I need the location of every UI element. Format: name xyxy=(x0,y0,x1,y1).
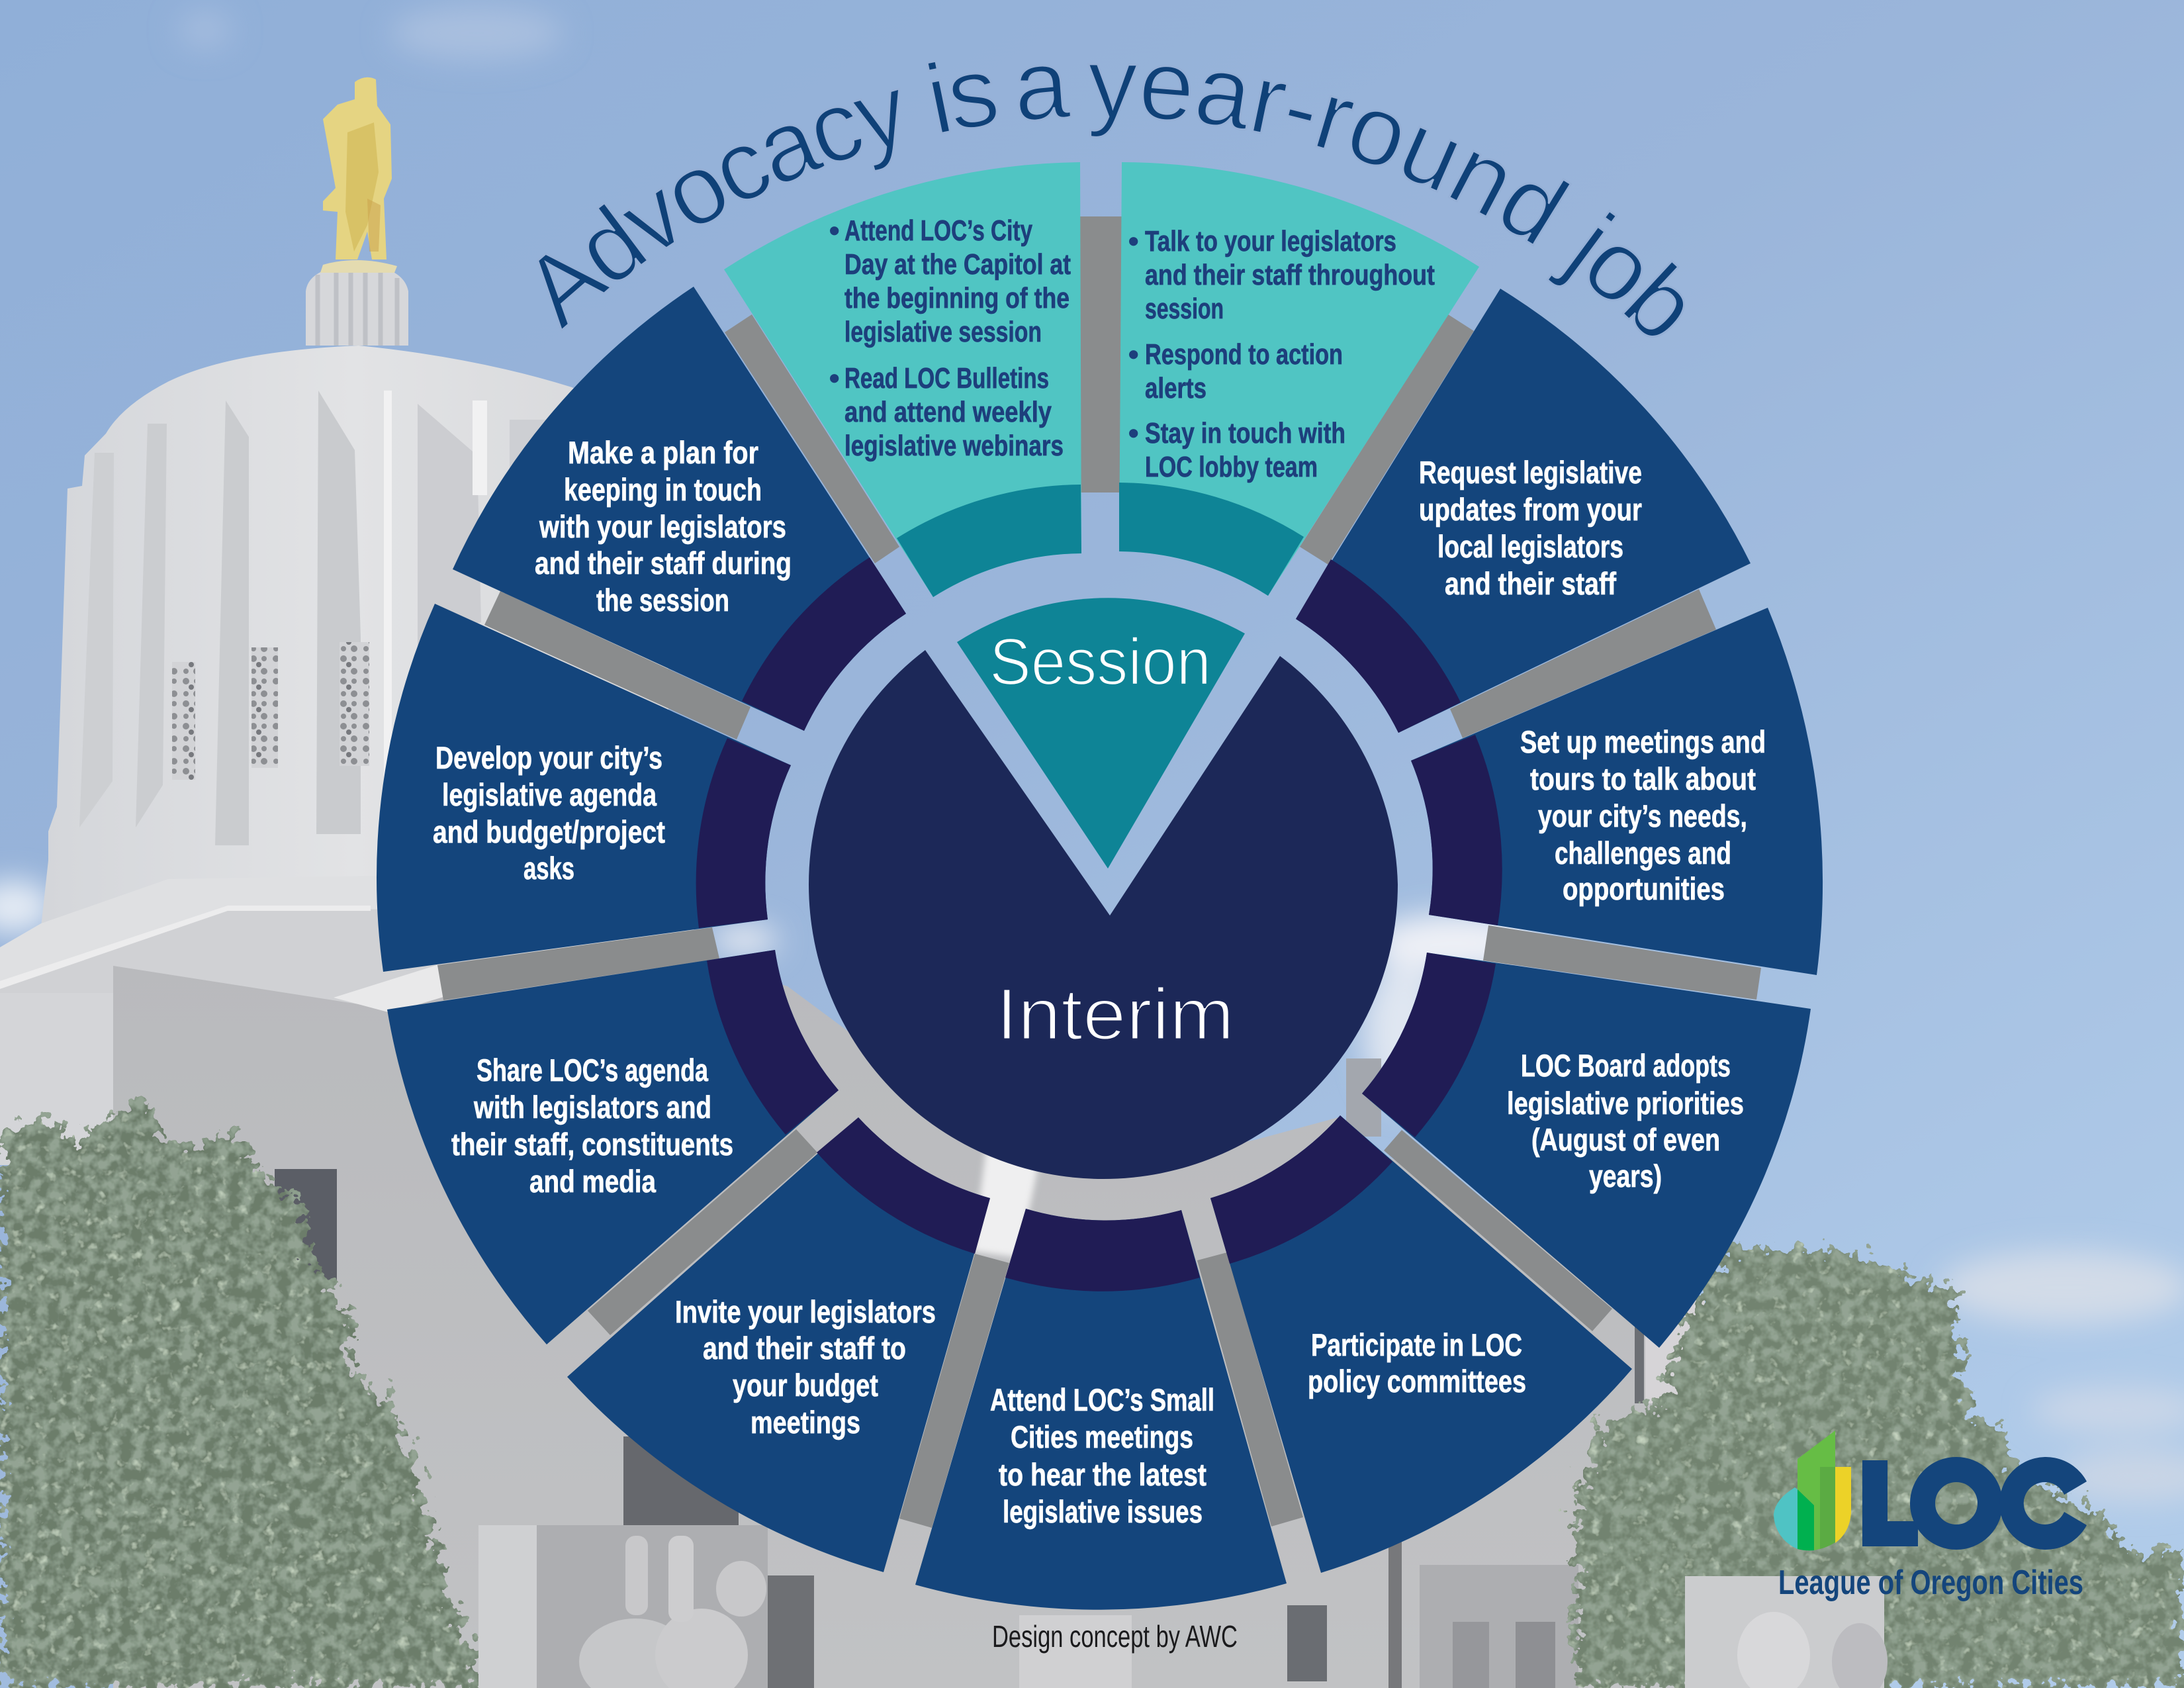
text: talk, respond, stay in touch bullets: Respond to action xyxy=(1145,338,1343,371)
text: City Day and bulletins bullets: legislative session xyxy=(844,316,1042,348)
text: make a plan xyxy=(535,435,792,618)
text: make a plan: the session xyxy=(596,583,729,618)
text: request updates: and their staff xyxy=(1445,566,1616,601)
text: invite: meetings xyxy=(751,1405,860,1440)
text: request updates: local legislators xyxy=(1437,529,1623,564)
text: request updates: Request legislative xyxy=(1419,455,1642,490)
text: make a plan: Make a plan for xyxy=(568,435,758,470)
logo wordmark: League of Oregon Cities xyxy=(1778,1564,2083,1602)
text: talk, respond, stay in touch bullets: • xyxy=(1128,225,1138,258)
text: set up meetings: tours to talk about xyxy=(1530,761,1756,796)
panel: small cities xyxy=(915,1209,1287,1610)
capitol main building facade xyxy=(113,957,1734,1688)
text: small cities: Attend LOC’s Small xyxy=(990,1382,1214,1417)
text: make a plan: with your legislators xyxy=(539,509,786,544)
panel: participate xyxy=(1210,1115,1632,1573)
text: develop agenda: and budget/project xyxy=(433,814,665,849)
text: City Day and bulletins bullets: legislative webinars xyxy=(844,430,1064,462)
text: City Day and bulletins bullets: Day at the Capitol at xyxy=(844,248,1071,281)
text: share agenda: their staff, constituents xyxy=(451,1127,733,1162)
title: curved heading: a xyxy=(1020,66,1070,120)
label: interim: Interim xyxy=(996,974,1234,1055)
text: small cities: to hear the latest xyxy=(999,1457,1206,1492)
text: participate: policy committees xyxy=(1308,1364,1526,1399)
text: talk, respond, stay in touch bullets: alerts xyxy=(1145,372,1206,404)
text: develop agenda: legislative agenda xyxy=(442,777,657,812)
text: City Day and bulletins bullets: Attend LOC’s City xyxy=(844,214,1032,247)
text: set up meetings: your city’s needs, xyxy=(1538,798,1747,833)
text: LOC board: LOC Board adopts xyxy=(1521,1048,1731,1083)
text: request updates xyxy=(1419,455,1642,601)
panel: develop agenda xyxy=(377,604,791,972)
text: set up meetings xyxy=(1520,724,1766,906)
text: invite: your budget xyxy=(733,1368,878,1403)
tree: right xyxy=(1574,1246,2184,1688)
statue group: right monument xyxy=(1685,1576,1888,1688)
panel: set up meetings xyxy=(1411,608,1823,975)
title: curved heading: job xyxy=(1549,212,1684,336)
text: small cities: legislative issues xyxy=(1003,1494,1203,1529)
text: talk, respond, stay in touch bullets: and their staff throughout xyxy=(1145,259,1435,291)
panel: make a plan xyxy=(453,287,906,731)
text: share agenda xyxy=(451,1053,733,1199)
text: develop agenda: asks xyxy=(523,851,574,886)
title: curved heading: is xyxy=(928,62,996,132)
text: participate: Participate in LOC xyxy=(1311,1327,1522,1362)
dome pedestal xyxy=(306,268,408,346)
text: talk, respond, stay in touch bullets xyxy=(1128,225,1435,483)
text: talk, respond, stay in touch bullets: • xyxy=(1128,338,1138,371)
panel: LOC board xyxy=(1362,953,1811,1348)
text: set up meetings: Set up meetings and xyxy=(1520,724,1766,759)
capitol base tiers xyxy=(0,874,715,1165)
text: City Day and bulletins bullets: • xyxy=(829,362,839,395)
grey spokes between segments xyxy=(437,216,1761,1528)
text: small cities: Cities meetings xyxy=(1011,1419,1193,1454)
text: share agenda: and media xyxy=(529,1164,657,1199)
text: share agenda: with legislators and xyxy=(473,1090,711,1125)
text: LOC board: (August of even xyxy=(1531,1122,1720,1157)
center: session wedge xyxy=(957,598,1245,868)
text: invite xyxy=(675,1294,936,1440)
text: talk, respond, stay in touch bullets: Stay in touch with xyxy=(1145,417,1345,449)
text: request updates: updates from your xyxy=(1419,492,1642,527)
text: talk, respond, stay in touch bullets: Talk to your legislators xyxy=(1145,225,1396,258)
icon: city drop xyxy=(1774,1430,1851,1550)
text: City Day and bulletins bullets: • xyxy=(829,214,839,247)
panel: session left teal segment xyxy=(724,162,1081,597)
text: City Day and bulletins bullets xyxy=(829,214,1071,462)
building window xyxy=(275,1169,337,1283)
text: invite: Invite your legislators xyxy=(675,1294,936,1329)
text: talk, respond, stay in touch bullets: session xyxy=(1145,293,1224,325)
panel: session right teal segment xyxy=(1119,162,1479,596)
text: LOC board: years) xyxy=(1589,1158,1662,1194)
text: invite: and their staff to xyxy=(703,1331,906,1366)
center: interim circle xyxy=(809,650,1398,1179)
text: City Day and bulletins bullets: Read LOC Bulletins xyxy=(844,362,1049,395)
text: set up meetings: opportunities xyxy=(1563,871,1725,906)
credit: design concept: Design concept by AWC xyxy=(992,1619,1238,1654)
text: City Day and bulletins bullets: the beginning of the xyxy=(844,282,1069,314)
statue group: left monument xyxy=(478,1525,768,1688)
text: City Day and bulletins bullets: and attend weekly xyxy=(844,396,1052,428)
text: set up meetings: challenges and xyxy=(1555,835,1731,870)
statue: gold pioneer xyxy=(320,77,397,273)
label: session: Session xyxy=(989,625,1211,699)
text: make a plan: and their staff during xyxy=(535,545,792,581)
panel: invite to budget meetings xyxy=(567,1117,990,1572)
logo letters: LOC shapes xyxy=(1862,1457,2087,1550)
tree: left xyxy=(0,1098,490,1688)
text: small cities xyxy=(990,1382,1214,1529)
text: talk, respond, stay in touch bullets: LOC lobby team xyxy=(1145,451,1318,483)
text: talk, respond, stay in touch bullets: • xyxy=(1128,417,1138,449)
text: make a plan: keeping in touch xyxy=(564,472,762,507)
text: develop agenda: Develop your city’s xyxy=(435,740,662,775)
text: share agenda: Share LOC’s agenda xyxy=(477,1053,709,1088)
text: participate xyxy=(1308,1327,1526,1399)
panel: request updates xyxy=(1296,289,1751,733)
title: curved heading: Advocacy xyxy=(539,90,898,328)
title: curved heading: year-round xyxy=(1089,65,1570,244)
text: LOC board: legislative priorities xyxy=(1507,1086,1744,1121)
text: LOC board xyxy=(1507,1048,1744,1194)
logo: League of Oregon Cities xyxy=(1774,1430,2087,1602)
capitol dome drum xyxy=(41,346,668,927)
panel: share agenda xyxy=(387,950,839,1344)
title: curved heading xyxy=(539,62,1684,336)
text: develop agenda xyxy=(433,740,665,886)
